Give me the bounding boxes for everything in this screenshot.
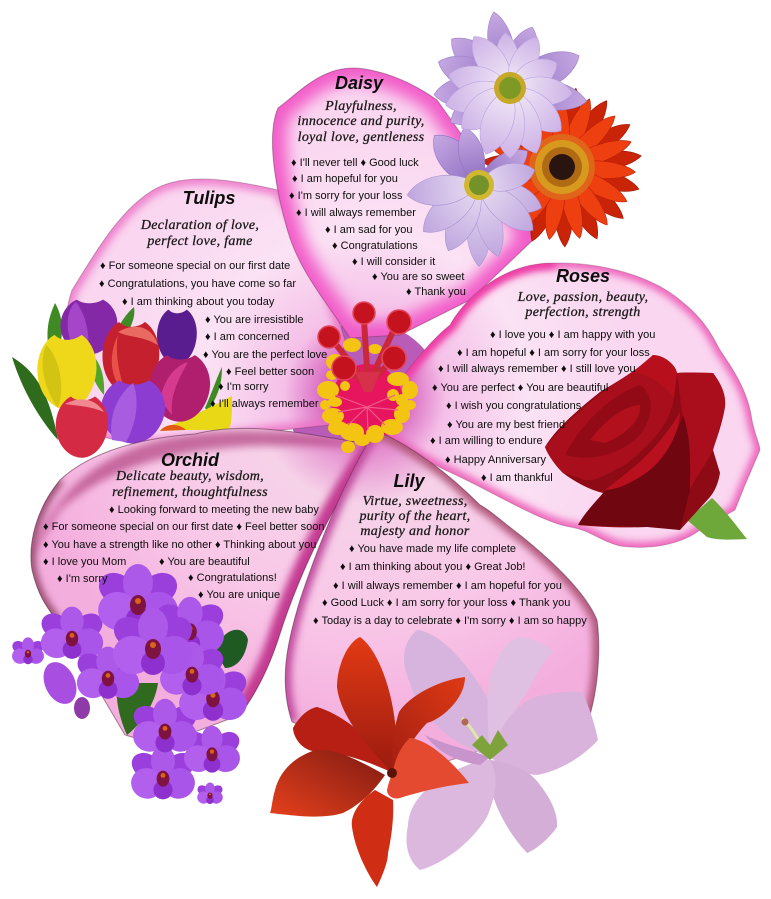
daisy messages: ♦ I am sad for you	[325, 224, 413, 236]
panel: Lily petal	[270, 430, 599, 887]
orchid messages: ♦ You are beautiful	[159, 556, 250, 568]
tulips messages: ♦ You are the perfect love	[203, 349, 327, 361]
tulips messages: ♦ Congratulations, you have come so far	[99, 278, 296, 290]
lily messages: ♦ Good Luck ♦ I am sorry for your loss ♦ Thank you	[322, 597, 570, 609]
daisy messages: ♦ I will always remember	[296, 207, 416, 219]
daisy messages: ♦ Thank you	[406, 286, 466, 298]
orchid messages: ♦ Looking forward to meeting the new baby	[109, 504, 319, 516]
daisy petal shape	[272, 68, 535, 338]
roses heading: Roses	[556, 266, 610, 286]
orchid heading: Orchid	[161, 450, 220, 470]
orchid messages: ♦ I love you Mom	[43, 556, 126, 568]
icon: petal centre backing	[287, 322, 443, 478]
lily messages: ♦ I am thinking about you ♦ Great Job!	[340, 561, 526, 573]
icon: top daisy	[433, 9, 589, 159]
daisy heading: Daisy	[335, 73, 384, 93]
orchid petal shape	[30, 428, 375, 745]
roses messages: ♦ I am thankful	[481, 472, 553, 484]
icon: pink lily	[404, 630, 598, 870]
panel: Tulips petal	[12, 179, 345, 458]
roses messages: ♦ Happy Anniversary	[445, 454, 546, 466]
orchid messages: ♦ Congratulations!	[188, 572, 277, 584]
panel: Roses petal	[370, 263, 760, 547]
roses petal shape	[370, 263, 760, 547]
roses messages: ♦ You are perfect ♦ You are beautiful	[432, 382, 608, 394]
roses messages: ♦ I will always remember ♦ I still love you	[438, 363, 636, 375]
orchid messages: ♦ You have a strength like no other ♦ Thinking about you	[43, 539, 316, 551]
roses messages: ♦ I am hopeful ♦ I am sorry for your loss	[457, 347, 650, 359]
tulips messages: ♦ You are irresistible	[205, 314, 304, 326]
roses meaning: Love, passion, beauty,	[517, 290, 648, 305]
daisy messages: ♦ I'll never tell ♦ Good luck	[291, 157, 419, 169]
panel: Orchid petal	[10, 428, 375, 805]
icon: red gerbera	[482, 87, 643, 247]
lily messages: ♦ I will always remember ♦ I am hopeful for you	[333, 580, 562, 592]
orchid messages: ♦ You are unique	[198, 589, 280, 601]
icon: hibiscus stamen	[317, 302, 418, 453]
daisy messages: ♦ Congratulations	[332, 240, 418, 252]
roses messages: ♦ I am willing to endure	[430, 435, 543, 447]
tulips messages: ♦ For someone special on our first date	[100, 260, 290, 272]
daisy messages: ♦ You are so sweet	[372, 271, 464, 283]
icon: red rose	[545, 355, 747, 540]
tulips meaning: Declaration of love,	[140, 218, 259, 233]
orchid meaning: refinement, thoughtfulness	[112, 485, 268, 500]
icon: tulip bouquet	[12, 300, 232, 458]
roses messages: ♦ I love you ♦ I am happy with you	[490, 329, 655, 341]
lily meaning: Virtue, sweetness,	[362, 494, 468, 509]
tulips messages: ♦ I'm sorry	[218, 381, 269, 393]
daisy meaning: loyal love, gentleness	[298, 130, 425, 145]
lily meaning: purity of the heart,	[358, 509, 470, 524]
tulips messages: ♦ Feel better soon	[226, 366, 314, 378]
daisy messages: ♦ I am hopeful for you	[292, 173, 398, 185]
lily messages: ♦ You have made my life complete	[349, 543, 516, 555]
daisy meaning: Playfulness,	[324, 99, 397, 114]
lily meaning: majesty and honor	[360, 524, 470, 539]
tulips petal shape	[65, 179, 345, 445]
roses messages: ♦ I wish you congratulations	[446, 400, 582, 412]
roses messages: ♦ You are my best friend	[447, 419, 565, 431]
orchid messages: ♦ For someone special on our first date ♦ Feel better soon	[43, 521, 324, 533]
daisy meaning: innocence and purity,	[297, 114, 425, 129]
roses meaning: perfection, strength	[524, 305, 641, 320]
icon: orchid cluster	[10, 564, 251, 805]
daisy messages: ♦ I will consider it	[352, 256, 435, 268]
tulips messages: ♦ I'll always remember	[210, 398, 319, 410]
icon: red lily	[270, 637, 469, 887]
panel: Daisy petal	[272, 9, 643, 338]
tulips meaning: perfect love, fame	[146, 234, 253, 249]
orchid meaning: Delicate beauty, wisdom,	[115, 469, 264, 484]
orchid messages: ♦ I'm sorry	[57, 573, 108, 585]
lily messages: ♦ Today is a day to celebrate ♦ I'm sorry ♦ I am so happy	[313, 615, 587, 627]
icon: lower daisy	[405, 125, 546, 266]
daisy messages: ♦ I'm sorry for your loss	[289, 190, 403, 202]
lily petal shape	[285, 430, 599, 770]
tulips messages: ♦ I am thinking about you today	[122, 296, 275, 308]
lily heading: Lily	[393, 471, 425, 491]
tulips heading: Tulips	[183, 188, 235, 208]
tulips messages: ♦ I am concerned	[205, 331, 290, 343]
